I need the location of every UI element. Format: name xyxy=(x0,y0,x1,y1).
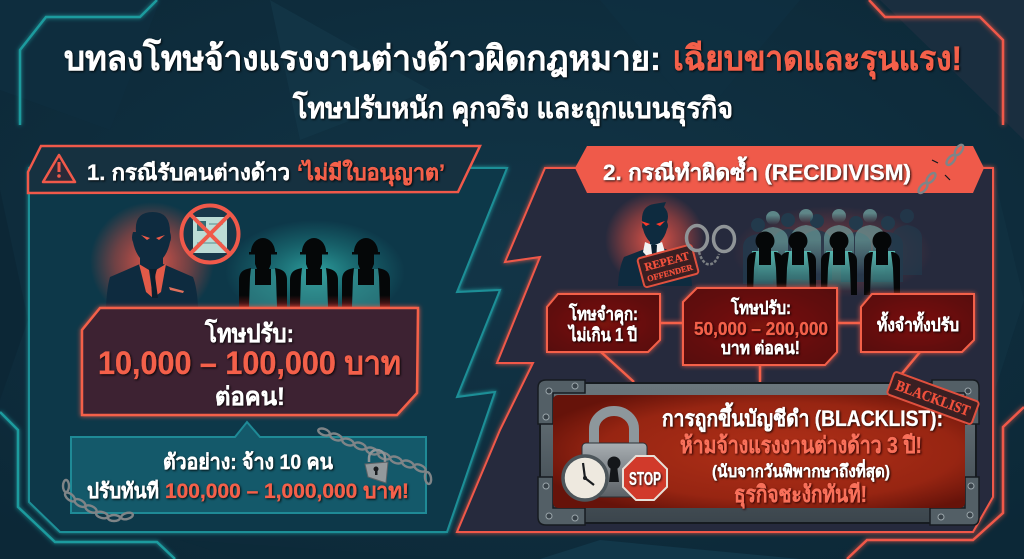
icon: clock xyxy=(563,456,607,500)
plate text: ห้ามจ้างแรงงานต่างด้าว 3 ปี! xyxy=(680,432,922,458)
icon: chain bottom left xyxy=(63,480,134,521)
panel heading xyxy=(575,143,984,195)
panel heading xyxy=(28,146,480,193)
metal frame xyxy=(538,380,979,525)
penalty box: โทษปรับ: xyxy=(204,318,294,348)
blacklist plate xyxy=(538,371,979,525)
title: เฉียบขาดและรุนแรง! xyxy=(673,40,962,80)
stamp: repeat offender xyxy=(637,244,699,288)
box: jail term: โทษจำคุก: xyxy=(568,303,638,326)
box: fine xyxy=(683,288,837,365)
box: fine: 50,000 – 200,000 xyxy=(694,319,828,339)
corner frame: top left xyxy=(20,0,157,125)
penalty box: 10,000 – 100,000 บาท xyxy=(98,345,401,381)
box: jail term: ไม่เกิน 1 ปี xyxy=(567,324,637,345)
box: both penalties xyxy=(861,294,974,352)
icon: stop sign xyxy=(623,456,667,500)
stamp: repeat offender: OFFENDER xyxy=(646,262,695,284)
example callout: ตัวอย่าง: จ้าง 10 คน xyxy=(163,450,334,474)
icon: crossed-out permit xyxy=(181,205,239,263)
icon: warning triangle xyxy=(43,155,75,182)
example callout: ปรับทันที xyxy=(87,479,159,503)
box: jail term xyxy=(547,294,660,352)
figures: crowd of workers xyxy=(732,206,932,298)
plate text xyxy=(662,402,943,509)
plate text: การถูกขึ้นบัญชีดำ (BLACKLIST): xyxy=(662,402,943,433)
subtitle: โทษปรับหนัก คุกจริง และถูกแบนธุรกิจ xyxy=(292,90,733,126)
panel background xyxy=(457,168,993,532)
corner frame: bottom left xyxy=(0,412,175,559)
stamp: blacklist: BLACKLIST xyxy=(893,378,972,420)
icon: stop sign: STOP xyxy=(629,469,661,489)
red plate xyxy=(553,395,965,508)
figures: three workers xyxy=(225,220,405,324)
panel heading: 2. กรณีทำผิดซ้ำ (RECIDIVISM) xyxy=(603,156,911,185)
stamp: repeat offender: REPEAT xyxy=(643,250,691,274)
panel: unlicensed workers xyxy=(28,146,507,532)
penalty box xyxy=(82,308,418,415)
penalty box: ต่อคน! xyxy=(215,383,285,411)
plate text: ธุรกิจชะงักทันที! xyxy=(734,481,867,509)
corner frame: bottom right xyxy=(847,407,1024,559)
icon: broken chain xyxy=(917,143,965,195)
plate text: (นับจากวันพิพากษาถึงที่สุด) xyxy=(712,459,890,482)
panel background xyxy=(29,168,507,532)
icon: chain with padlock xyxy=(317,427,432,484)
corner frame: top right xyxy=(869,0,1003,125)
example callout: 100,000 – 1,000,000 บาท! xyxy=(165,480,409,503)
connectors xyxy=(601,323,920,382)
title xyxy=(64,38,962,80)
box: fine: โทษปรับ: xyxy=(730,297,791,318)
icon: handcuffs xyxy=(686,226,734,264)
panel: repeat offence xyxy=(457,143,993,532)
panel heading: ‘ไม่มีใบอนุญาต’ xyxy=(297,159,445,187)
figure: repeat offender xyxy=(605,192,705,288)
panel heading: 1. กรณีรับคนต่างด้าว xyxy=(87,160,290,185)
box: fine: บาท ต่อคน! xyxy=(721,338,800,358)
figure: employer silhouette xyxy=(90,202,214,322)
icon: padlock xyxy=(582,411,647,497)
box: both penalties: ทั้งจำทั้งปรับ xyxy=(877,311,959,335)
title: บทลงโทษจ้างแรงงานต่างด้าวผิดกฎหมาย: xyxy=(64,38,661,78)
example callout xyxy=(71,422,426,513)
